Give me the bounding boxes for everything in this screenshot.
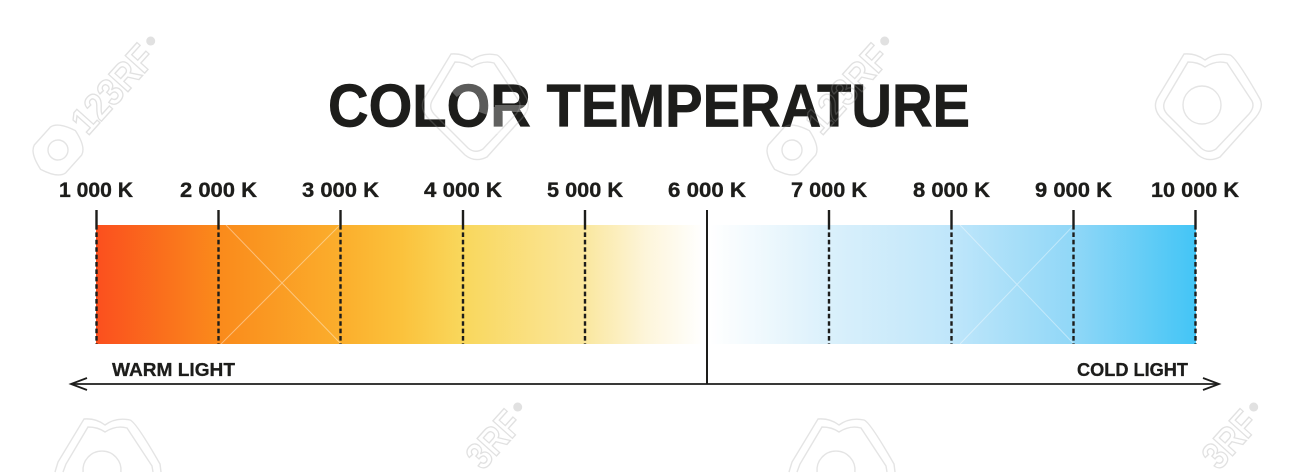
watermark: camera stamp bottom centre [789, 419, 895, 472]
temperature labels: 9 000 K [1035, 178, 1112, 202]
colour gradient bar [96, 225, 1196, 344]
temperature labels: 3 000 K [302, 178, 379, 202]
title: COLOR TEMPERATURE [328, 72, 970, 140]
temperature labels: 10 000 K [1151, 178, 1239, 202]
watermark: camera stamp top right [1155, 54, 1261, 160]
temperature labels: 5 000 K [547, 178, 623, 202]
arrow: cold light direction [707, 378, 1219, 390]
label: cold light: COLD LIGHT [1077, 359, 1189, 380]
arrow: warm light direction [71, 378, 707, 390]
temperature labels: 1 000 K [59, 178, 133, 202]
watermark: logo top centre [759, 26, 907, 184]
watermark crosses on bar [221, 225, 1074, 344]
watermark: logo top left: 123RF [63, 37, 164, 142]
temperature tick marks [96, 210, 1196, 344]
temperature labels: 2 000 K [180, 178, 257, 202]
watermark: camera stamp over title [422, 54, 528, 160]
temperature labels: 4 000 K [424, 178, 502, 202]
label: warm light: WARM LIGHT [112, 359, 236, 380]
watermark: logo top left [25, 26, 173, 184]
watermark: logo top centre: 123RF [797, 37, 898, 142]
temperature labels: 6 000 K [668, 178, 746, 202]
temperature labels [59, 178, 1239, 202]
temperature labels: 8 000 K [913, 178, 990, 202]
centre divider line at 6000 K [706, 210, 708, 384]
watermark: camera stamp bottom left [55, 419, 161, 472]
temperature labels: 7 000 K [791, 178, 867, 202]
